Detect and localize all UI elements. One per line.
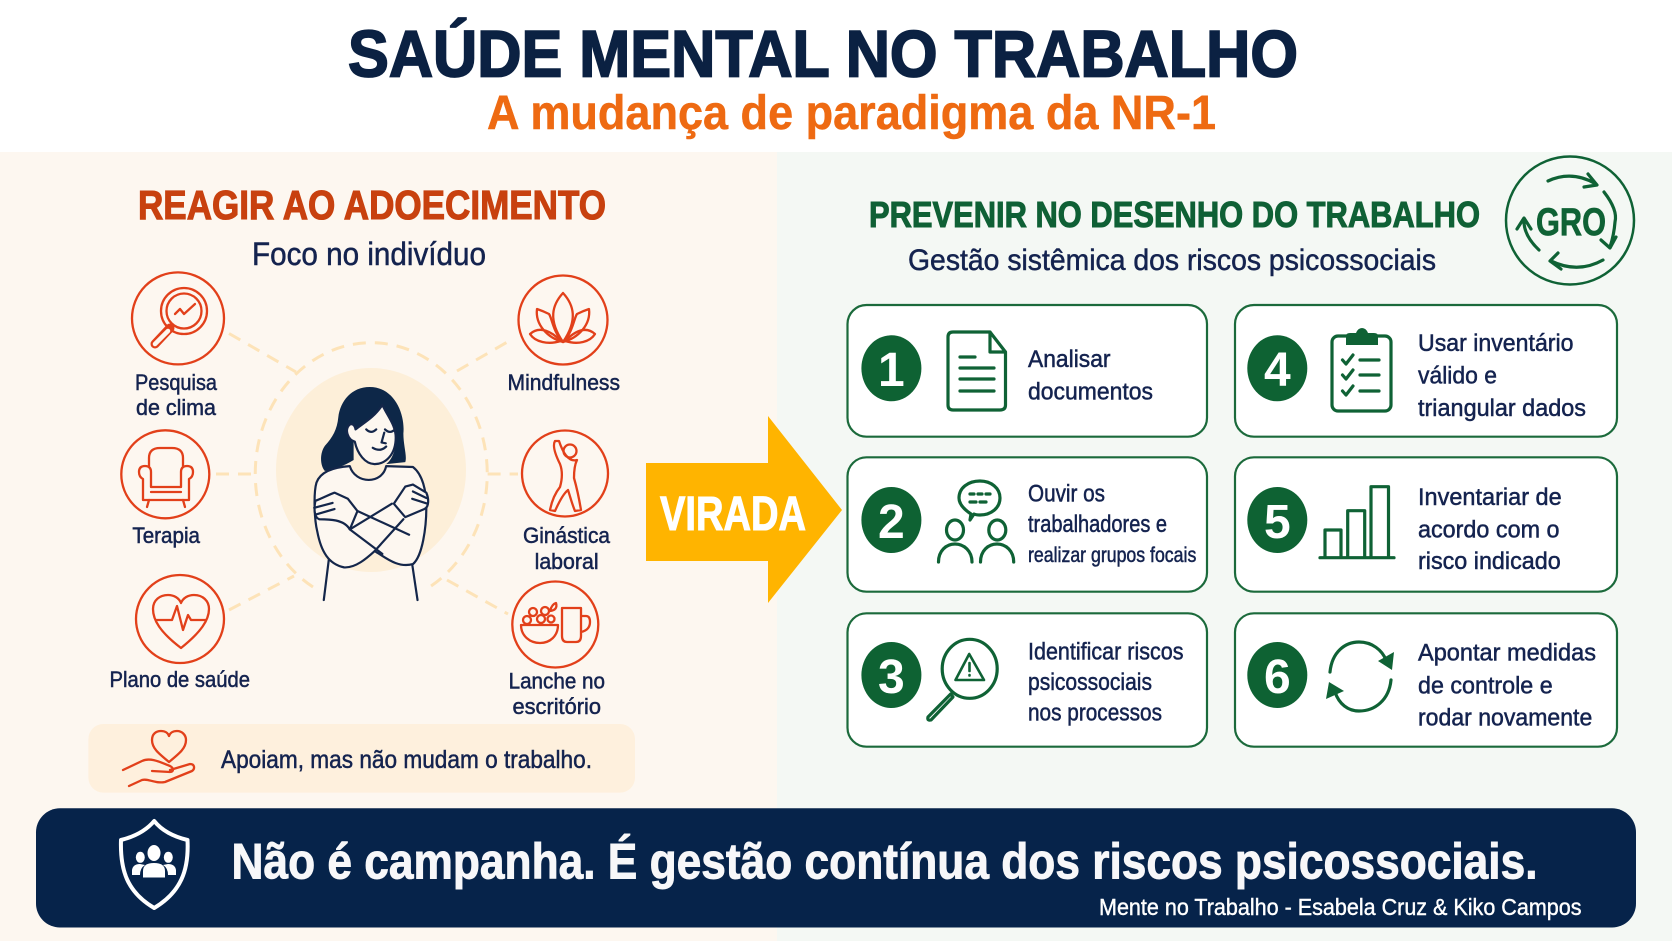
icon: mindfulness lotus <box>518 276 608 364</box>
card 3: identificar riscos <box>848 613 1207 747</box>
label: lanche no escritório: Lanche no <box>509 669 605 694</box>
arrow: virada: VIRADA <box>660 488 806 541</box>
text: ouvir os trabalhadores: realizar grupos focais <box>1028 544 1196 567</box>
text: usar inventário: triangular dados <box>1418 395 1586 422</box>
text: inventariar: acordo com o <box>1418 516 1560 543</box>
icon: cycle arrows <box>1326 642 1394 711</box>
text: identificar riscos: nos processos <box>1028 700 1162 726</box>
card 6: apontar medidas <box>1235 613 1617 747</box>
banner message: Não é campanha. É gestão contínua dos riscos psicossociais. <box>232 833 1538 889</box>
label: plano de saúde: Plano de saúde <box>110 667 250 692</box>
panel background: right <box>777 152 1672 941</box>
text: inventariar: Inventariar de <box>1418 484 1562 511</box>
icon: clipboard checklist <box>1332 328 1391 411</box>
text: inventariar: risco indicado <box>1418 548 1561 575</box>
label: ginástica laboral: laboral <box>535 549 599 574</box>
card 5: inventariar <box>1235 457 1617 592</box>
text: analisar documentos <box>1028 346 1153 406</box>
heading: prevenir: PREVENIR NO DESENHO DO TRABALHO <box>869 194 1480 235</box>
text: apontar medidas <box>1418 640 1596 732</box>
icon: lanche bowl and mug <box>512 582 598 668</box>
panel: reagir ao adoecimento <box>88 182 635 793</box>
text: apontar medidas: Apontar medidas <box>1418 640 1596 666</box>
card 4: usar inventário: 4 <box>1264 344 1291 397</box>
card 2: ouvir os trabalhadores: 2 <box>878 496 905 549</box>
text: ouvir os trabalhadores: trabalhadores e <box>1028 511 1167 538</box>
card 4: usar inventário <box>1235 305 1617 437</box>
text: usar inventário <box>1418 330 1586 422</box>
dashed ring <box>255 343 487 587</box>
label: ginástica laboral: Ginástica <box>523 523 611 548</box>
text: inventariar <box>1418 484 1562 575</box>
callout: apoiam <box>88 724 635 793</box>
icon: ginástica laboral <box>522 430 608 516</box>
credit: Mente no Trabalho - Esabela Cruz & Kiko Campos <box>1099 894 1582 920</box>
icon: people talking <box>938 481 1014 562</box>
label: lanche no escritório: escritório <box>512 694 601 719</box>
text: ouvir os trabalhadores <box>1028 480 1196 567</box>
text: usar inventário: válido e <box>1418 362 1497 389</box>
label: pesquisa de clima: Pesquisa <box>135 370 218 395</box>
icon: pesquisa de clima <box>132 272 224 364</box>
text: analisar documentos: documentos <box>1028 378 1153 406</box>
label: ginástica laboral <box>523 523 611 574</box>
icon: document <box>948 332 1006 410</box>
text: usar inventário: Usar inventário <box>1418 330 1574 357</box>
card 2: ouvir os trabalhadores <box>848 457 1207 592</box>
text: apontar medidas: de controle e <box>1418 672 1553 699</box>
panel background: left <box>0 152 777 941</box>
text: identificar riscos: Identificar riscos <box>1028 638 1184 666</box>
badge: GRO: GRO <box>1536 201 1606 244</box>
heading: reagir: REAGIR AO ADOECIMENTO <box>138 182 606 228</box>
subtitle: A mudança de paradigma da NR-1 <box>487 87 1216 140</box>
subheading: gestão sistêmica: Gestão sistêmica dos riscos psicossociais <box>908 244 1436 277</box>
central halo <box>276 368 466 572</box>
card 1: analisar documentos <box>848 305 1207 437</box>
text: identificar riscos: psicossociais <box>1028 669 1152 696</box>
title: SAÚDE MENTAL NO TRABALHO <box>348 16 1298 90</box>
card 1: analisar documentos: 1 <box>878 344 905 397</box>
icon: bar chart <box>1320 487 1394 558</box>
icon: plano de saúde heart <box>136 575 224 663</box>
arrow: virada <box>646 416 842 603</box>
card 3: identificar riscos: 3 <box>878 651 905 704</box>
card 6: apontar medidas: 6 <box>1264 651 1291 704</box>
label: pesquisa de clima: de clima <box>136 395 217 420</box>
callout text: Apoiam, mas não mudam o trabalho. <box>221 746 592 774</box>
label: pesquisa de clima <box>135 370 218 420</box>
badge: GRO <box>1506 156 1634 284</box>
illustration: person hugging self <box>314 387 428 600</box>
label: lanche no escritório <box>509 669 605 719</box>
panel: prevenir no desenho do trabalho <box>848 156 1634 747</box>
icon: magnifier with warning <box>928 639 997 720</box>
text: apontar medidas: rodar novamente <box>1418 704 1592 732</box>
label: terapia: Terapia <box>132 523 201 548</box>
icon: hand with heart <box>123 731 194 786</box>
card 5: inventariar: 5 <box>1264 496 1291 549</box>
banner: conclusão <box>36 808 1636 928</box>
text: analisar documentos: Analisar <box>1028 346 1110 373</box>
icon: terapia armchair <box>121 430 209 518</box>
connectors <box>216 334 518 614</box>
subheading: foco no indivíduo: Foco no indivíduo <box>252 236 486 272</box>
label: mindfulness: Mindfulness <box>508 370 620 395</box>
icon: shield with people <box>121 821 188 908</box>
text: ouvir os trabalhadores: Ouvir os <box>1028 480 1105 508</box>
text: identificar riscos <box>1028 638 1184 726</box>
